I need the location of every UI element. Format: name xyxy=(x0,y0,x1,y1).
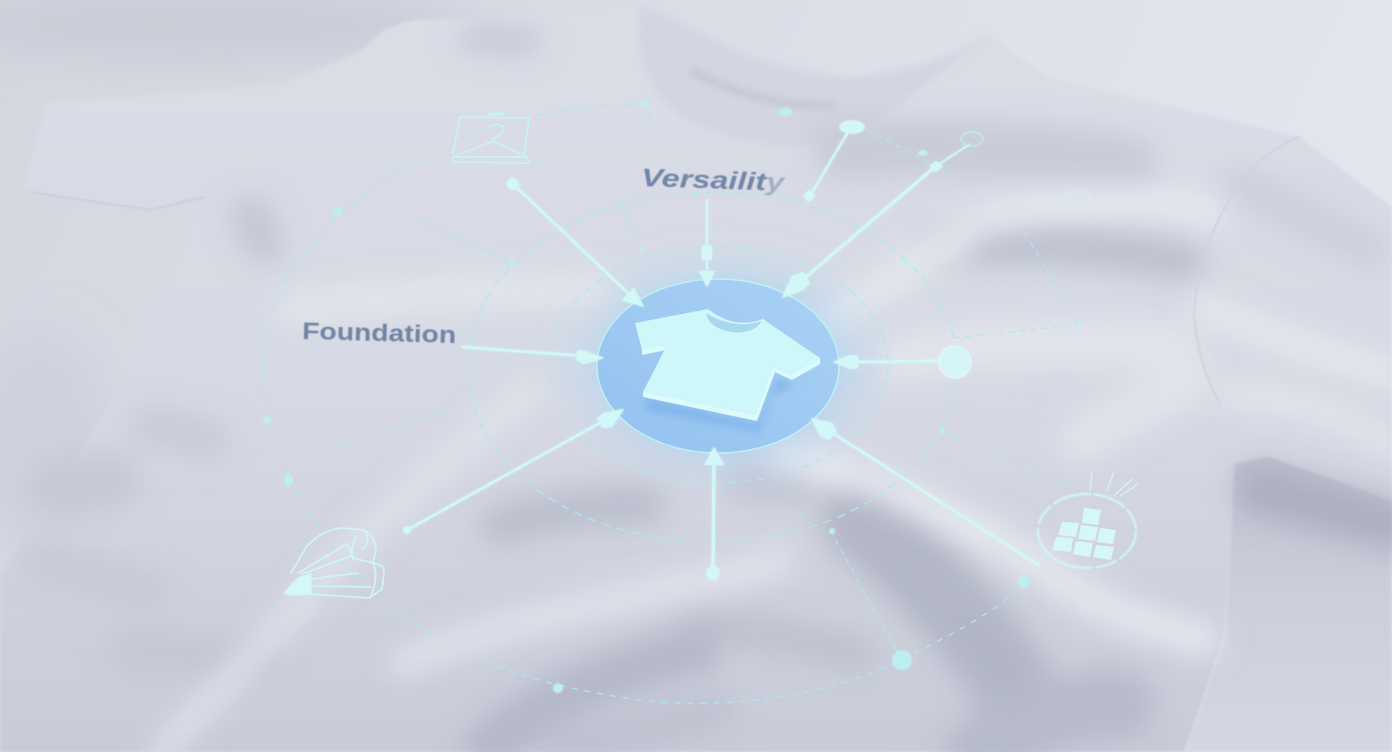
icon: hanger xyxy=(453,114,529,163)
arrow: far upper-right xyxy=(936,144,970,166)
thin dashed connectors xyxy=(338,104,1078,660)
hub disc xyxy=(597,279,839,453)
arrow: bottom-left xyxy=(404,409,624,532)
label: Foundation: Foundation xyxy=(302,318,456,349)
concentric dashed rings xyxy=(262,104,1025,703)
arrow: top xyxy=(699,199,715,287)
lower-right table shadow xyxy=(1185,456,1392,752)
arrow: bottom-right xyxy=(811,418,1040,566)
node dots on rings xyxy=(263,100,1092,693)
icon: central t-shirt xyxy=(635,309,822,432)
arrow: left xyxy=(462,347,604,364)
label: Versatility: Versailit y xyxy=(641,164,786,197)
light fabric ridges xyxy=(160,201,1392,752)
collar shading xyxy=(638,4,985,146)
central glowing hub xyxy=(546,238,898,494)
arrow: upper-right short xyxy=(803,132,848,202)
arrow: top-left xyxy=(508,180,644,307)
arrow: top-right xyxy=(782,161,943,298)
hub glow xyxy=(546,238,898,494)
icon: blocks in a circle xyxy=(1038,472,1138,568)
arrow: right xyxy=(833,355,938,369)
arrow: bottom xyxy=(704,447,724,578)
icon: stacked folded clothes xyxy=(284,528,384,598)
shirt seams xyxy=(30,137,1300,403)
arrows into hub xyxy=(404,132,1040,578)
